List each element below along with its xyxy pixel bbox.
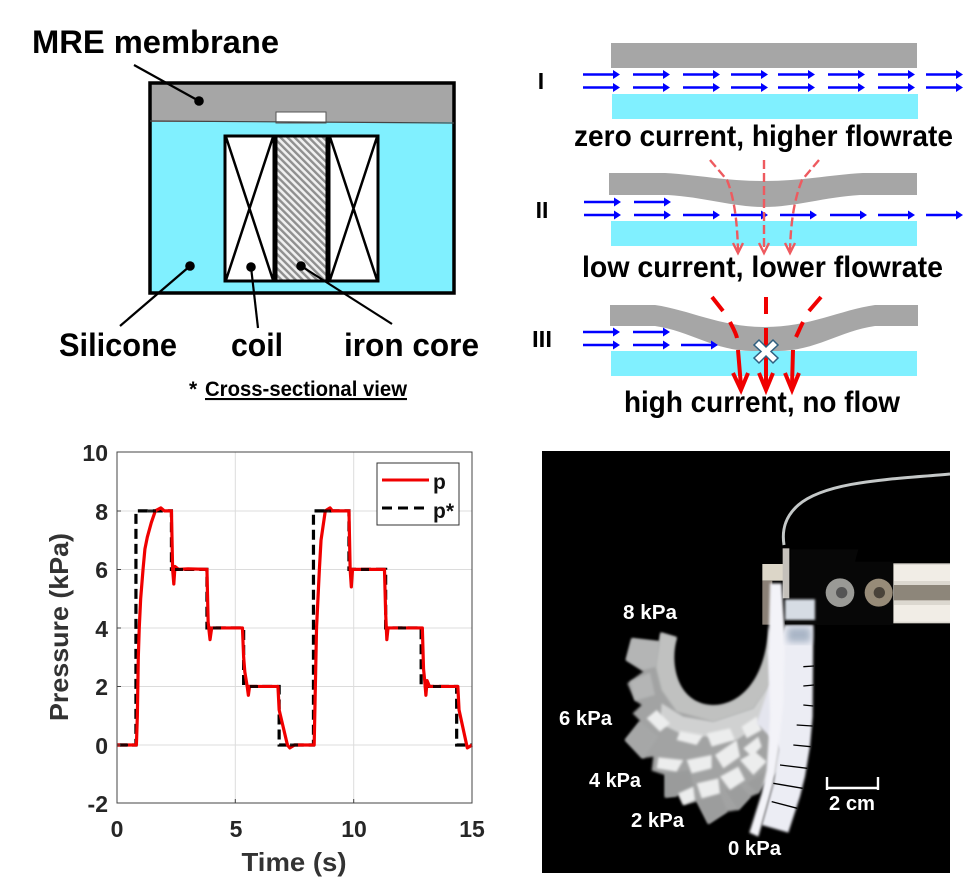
state II magnetic field arrows — [710, 160, 819, 253]
grid lines — [117, 452, 472, 803]
0 kPa fins — [762, 625, 813, 833]
state I numeral: I — [538, 68, 544, 94]
0 kPa spine — [749, 583, 785, 837]
x axis tick labels: 15 — [459, 816, 485, 842]
bright fin tips — [647, 710, 767, 805]
y axis tick labels: 6 — [95, 557, 108, 583]
clamp lower edge — [785, 621, 817, 624]
label: MRE membrane: MRE membrane — [32, 24, 279, 60]
state II membrane — [609, 173, 917, 207]
reference pressure curve p* — [117, 511, 472, 745]
4 kPa fin block — [665, 770, 693, 797]
air tube — [783, 474, 950, 545]
pressure label: 8 kPa: 8 kPa — [623, 602, 678, 624]
photo background — [542, 451, 950, 873]
y axis tick labels: 10 — [82, 440, 108, 466]
panel: actuator photograph — [542, 451, 950, 873]
iron core — [276, 136, 328, 281]
membrane divider — [150, 121, 454, 123]
light fin band — [660, 683, 773, 740]
MRE membrane layer — [150, 83, 454, 122]
state III silicone — [611, 351, 917, 376]
legend — [377, 463, 459, 525]
state I silicone — [612, 94, 918, 119]
y axis tick labels: 2 — [95, 674, 108, 700]
x axis title: Time (s) — [242, 847, 346, 877]
label: Silicone: Silicone — [59, 327, 177, 363]
x axis tick labels — [111, 816, 485, 842]
membrane notch — [276, 112, 326, 123]
aluminium rail — [893, 563, 950, 623]
state I flow arrows — [583, 70, 963, 92]
x axis tick labels: 0 — [111, 816, 123, 842]
note: cross-sectional view: Cross-sectional view — [205, 378, 408, 401]
pressure label: 0 kPa: 0 kPa — [728, 838, 782, 860]
2 kPa fin blocks — [696, 788, 762, 825]
whitish transition region — [758, 651, 780, 745]
core divider bars — [275, 135, 328, 282]
gel block — [785, 599, 815, 620]
coil left — [225, 136, 275, 281]
y axis tick labels: 8 — [95, 499, 108, 525]
fin gaps — [772, 666, 814, 808]
panel: valve states — [532, 43, 963, 419]
leader: coil — [246, 262, 258, 328]
y axis tick labels: 0 — [95, 733, 108, 759]
state I membrane — [611, 43, 917, 68]
panel: pressure chart — [44, 440, 485, 877]
label: iron core: iron core — [344, 327, 479, 363]
state III magnetic field arrows — [712, 297, 821, 390]
screw 2 — [865, 579, 893, 607]
leader: silicone — [120, 261, 195, 326]
8 kPa ring — [655, 627, 775, 722]
plot area — [117, 452, 472, 803]
metal strip — [783, 548, 789, 598]
screw 1 — [826, 578, 854, 607]
deformation silhouette — [625, 627, 780, 824]
state I caption: zero current, higher flowrate — [574, 120, 953, 153]
silicone body — [150, 122, 454, 292]
measured pressure curve p — [117, 508, 472, 748]
state II silicone — [611, 221, 917, 246]
coil right — [329, 136, 378, 281]
scale bar — [827, 777, 879, 790]
state III caption: high current, no flow — [624, 386, 901, 419]
note: asterisk: * — [189, 378, 198, 401]
scale label: 2 cm — [829, 793, 875, 815]
panel: cross-section diagram — [32, 24, 479, 401]
y axis tick labels — [82, 440, 108, 817]
state II flow arrows — [584, 198, 963, 220]
left mount — [762, 564, 783, 625]
legend: p* — [433, 500, 455, 523]
8 kPa fin blocks — [626, 638, 660, 701]
6 kPa fin block — [624, 721, 646, 760]
x axis tick labels: 5 — [230, 816, 243, 842]
plot frame — [117, 452, 472, 803]
label: coil: coil — [231, 327, 283, 363]
photo illustration — [625, 474, 950, 837]
leader: iron core — [296, 261, 392, 324]
state II numeral: II — [536, 197, 548, 223]
state III membrane — [610, 305, 918, 351]
pressure label: 6 kPa: 6 kPa — [559, 708, 613, 730]
x axis tick labels: 10 — [341, 816, 367, 842]
y axis title: Pressure (kPa) — [44, 533, 74, 721]
metal clamp — [790, 549, 893, 625]
pressure label: 4 kPa: 4 kPa — [589, 770, 642, 792]
pressure label: 2 kPa: 2 kPa — [631, 810, 685, 832]
y axis tick labels: -2 — [88, 791, 108, 817]
state III flow arrows — [583, 328, 718, 350]
state III numeral: III — [532, 326, 552, 352]
upper fin shadow — [787, 627, 811, 642]
y axis tick labels: 4 — [95, 616, 108, 642]
outer frame — [150, 83, 454, 293]
state II caption: low current, lower flowrate — [582, 251, 943, 284]
leader: MRE membrane — [134, 65, 204, 106]
flat segment dashes over p — [120, 511, 441, 745]
legend: p — [433, 471, 446, 494]
state III closure marker — [754, 340, 778, 363]
